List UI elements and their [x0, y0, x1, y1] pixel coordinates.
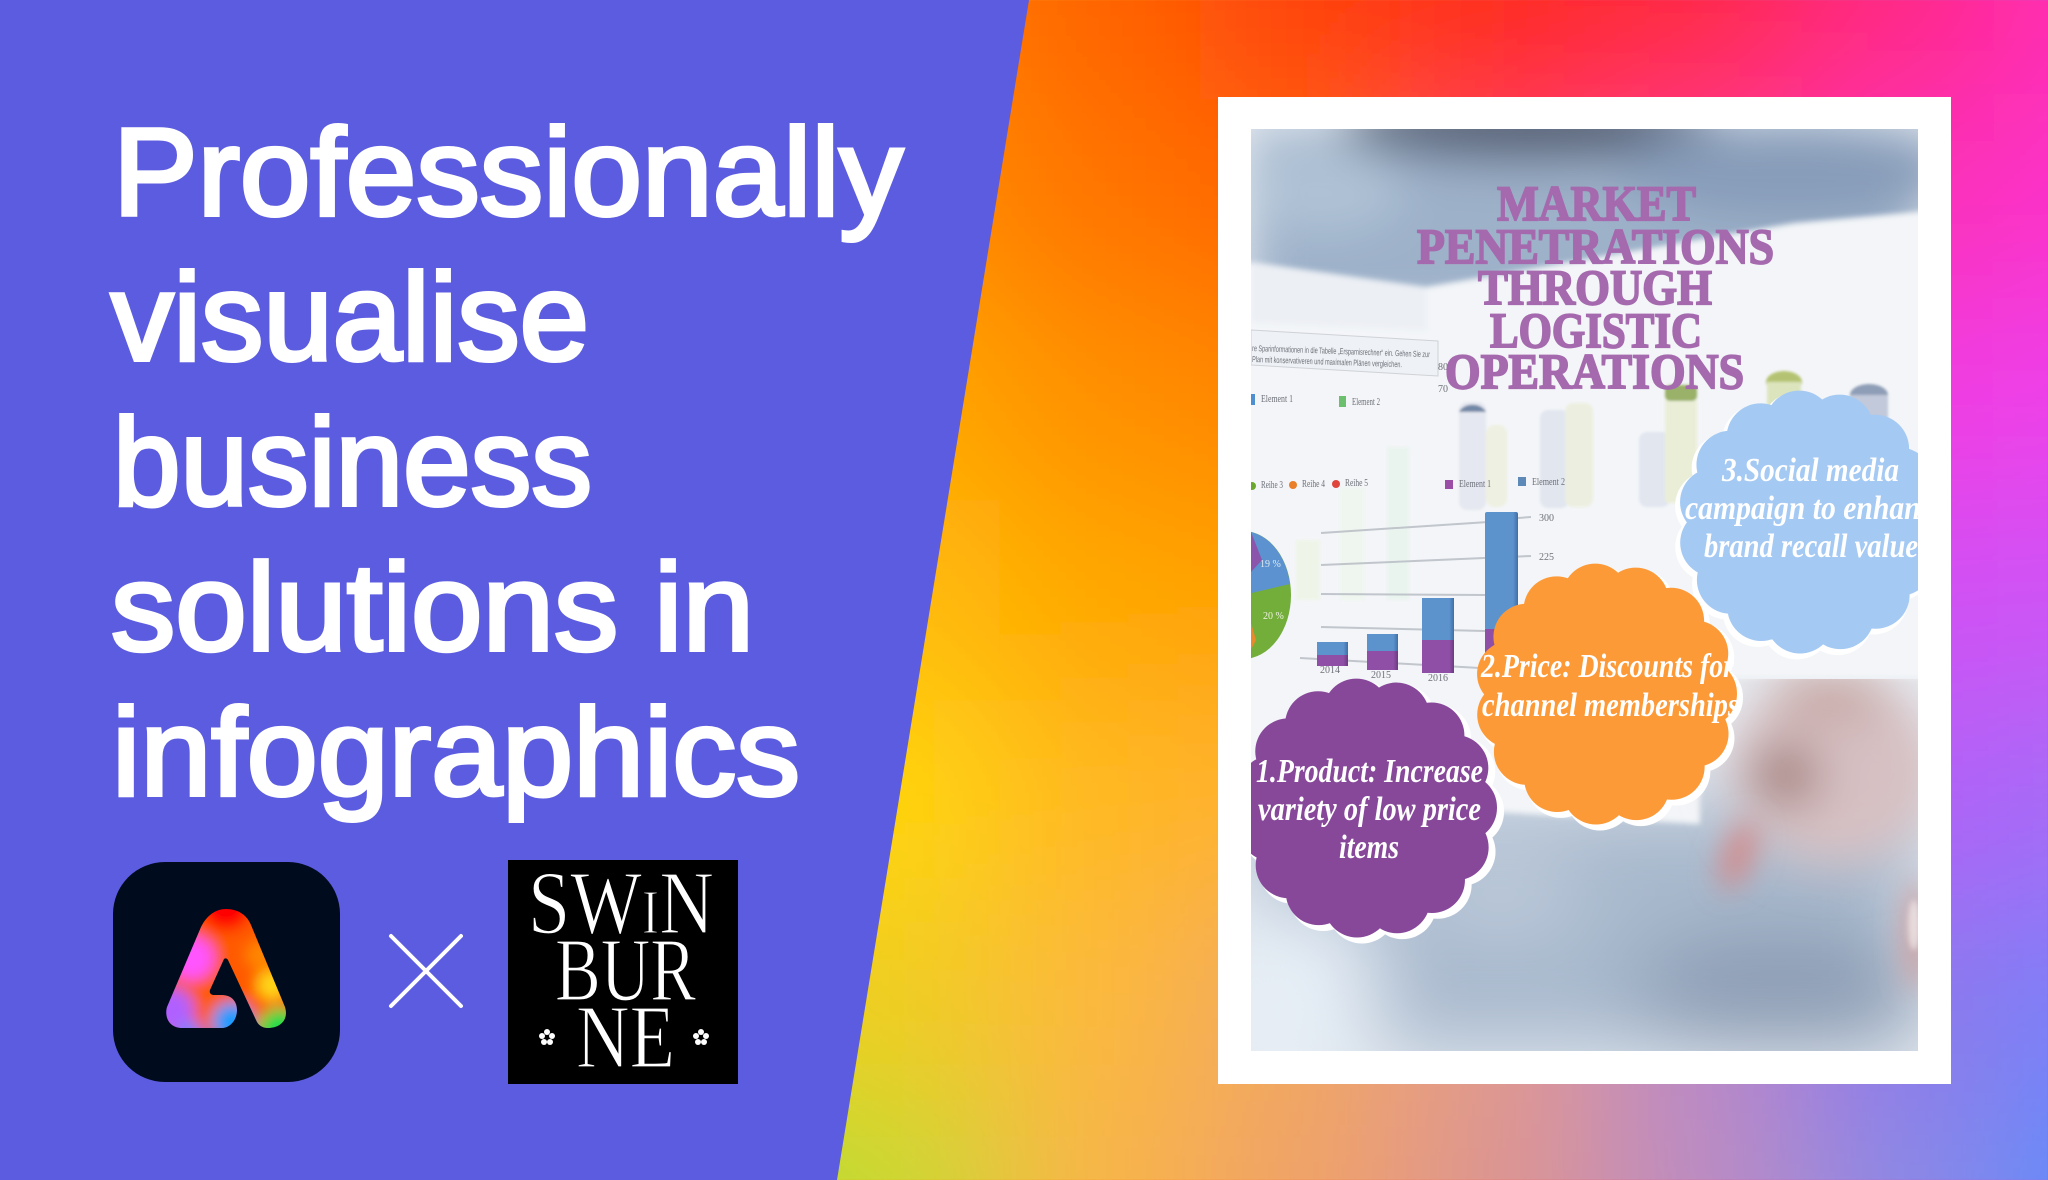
poster title — [1417, 175, 1774, 399]
poster photo background — [1251, 129, 1918, 1051]
logo: Swinburne: SWIN — [528, 854, 714, 953]
panel: poster white frame — [1218, 97, 1951, 1084]
title: infographics — [112, 684, 800, 822]
icon: multiply cross — [391, 936, 461, 1006]
callout: blue scalloped badge — [1685, 424, 1947, 625]
poster note and legends: 70 — [1438, 384, 1448, 395]
poster pie chart: 20 % — [1263, 611, 1284, 622]
poster note and legends: Plan mit konservativeren und maximalen Plänen vergleichen. — [1252, 354, 1402, 369]
poster note and legends: 80 — [1438, 362, 1448, 373]
poster bar chart: 2016 — [1428, 673, 1448, 684]
poster pie chart: 19 % — [1260, 559, 1281, 570]
poster bar chart: 225 — [1539, 552, 1554, 563]
title: Professionally — [113, 104, 903, 242]
poster note and legends: Element 1 — [1459, 479, 1491, 490]
poster note and legends: Reihe 4 — [1302, 479, 1325, 490]
callout: orange scalloped badge: 2.Price: Discounts for — [1480, 648, 1735, 685]
poster note and legends: Reihe 3 — [1261, 480, 1283, 491]
icon: Adobe Express logo — [113, 862, 340, 1082]
poster bar chart: 2014 — [1320, 665, 1340, 676]
poster title: OPERATIONS — [1445, 343, 1744, 399]
poster title: THROUGH — [1478, 259, 1712, 315]
poster bar chart — [1300, 512, 1554, 684]
callout: blue scalloped badge: campaign to enhance — [1685, 490, 1947, 527]
poster pie chart — [1251, 532, 1291, 658]
callout: purple scalloped badge: 1.Product: Increase — [1256, 753, 1483, 790]
callout: blue scalloped badge: 3.Social media — [1721, 452, 1899, 489]
panel: poster — [1251, 129, 1918, 1051]
callout: blue scalloped badge: brand recall value — [1704, 528, 1918, 565]
callout: purple scalloped badge: items — [1339, 829, 1399, 866]
panel: purple slanted left panel — [0, 0, 1029, 1180]
title: solutions in — [111, 539, 754, 677]
poster note and legends — [1248, 330, 1565, 491]
poster bar chart: 300 — [1539, 513, 1554, 524]
logo: Swinburne — [508, 854, 738, 1087]
poster faded cylinder chart — [1296, 371, 1888, 600]
poster title: PENETRATIONS — [1417, 218, 1774, 274]
callout: purple scalloped badge: variety of low price — [1258, 791, 1481, 828]
title — [111, 104, 903, 822]
callout: orange scalloped badge — [1480, 596, 1739, 797]
callout: orange scalloped badge: channel memberships — [1482, 687, 1739, 724]
logo: Swinburne: NE — [576, 988, 675, 1087]
title: visualise — [111, 249, 589, 387]
poster bar chart: 2015 — [1371, 670, 1391, 681]
title: business — [113, 394, 592, 532]
poster title: MARKET — [1497, 175, 1696, 231]
poster title: LOGISTIC — [1490, 302, 1702, 358]
poster note and legends: Element 2 — [1532, 477, 1565, 488]
poster note and legends: Reihe 5 — [1345, 478, 1368, 489]
poster note and legends: re Sparinformationen in die Tabelle „Ersparnisrechner“ ein. Gehen Sie zur — [1252, 343, 1430, 359]
callout: purple scalloped badge — [1256, 711, 1483, 910]
logo: Swinburne: BUR — [555, 921, 696, 1020]
poster note and legends: Element 1 — [1261, 394, 1293, 405]
poster note and legends: Element 2 — [1352, 397, 1380, 408]
